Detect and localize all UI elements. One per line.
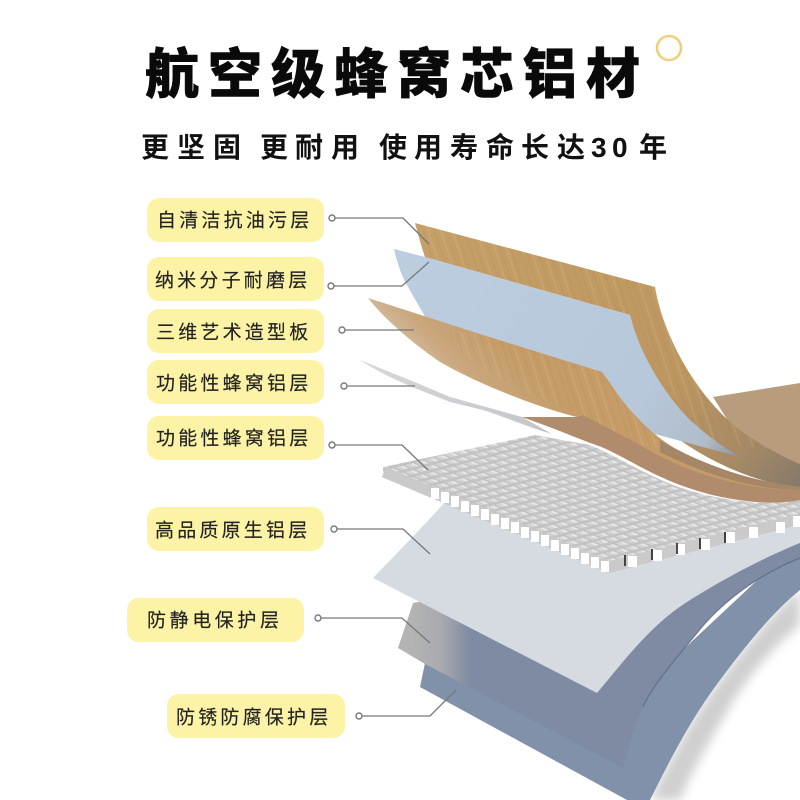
layer: thin grey sheet (360, 360, 552, 434)
callout: 高品质原生铝层: 高品质原生铝层 (155, 520, 310, 542)
layer: aluminium sheet (373, 500, 800, 693)
callout: 功能性蜂窝铝层 upper: 功能性蜂窝铝层 (156, 372, 311, 394)
subtitle: 更坚固更耐用使用寿命长达30年 (141, 131, 667, 163)
callout: 防锈防腐保护层: 防锈防腐保护层 (176, 706, 331, 728)
callout: 纳米分子耐磨层 (147, 257, 429, 301)
shadow under sheets (650, 590, 800, 800)
title: 航空级蜂窝芯铝材 (145, 45, 640, 105)
callout: 三维艺术造型板: 三维艺术造型板 (156, 322, 311, 344)
layer: top wood sheet (415, 223, 800, 488)
callout: 功能性蜂窝铝层 lower: 功能性蜂窝铝层 (156, 428, 311, 450)
callout: 纳米分子耐磨层: 纳米分子耐磨层 (155, 270, 310, 292)
flooring base surface (713, 383, 800, 475)
callout: 功能性蜂窝铝层 lower (147, 416, 428, 470)
callout: 自清洁抗油污层 (147, 198, 429, 244)
layer: rust-proof bottom sheet (420, 540, 800, 800)
callout: 三维艺术造型板 (147, 309, 414, 353)
callout: 功能性蜂窝铝层 upper (147, 360, 415, 404)
layer: honeycomb core (383, 435, 800, 573)
icon: decorative ring (657, 36, 681, 60)
layer: blue wear film (394, 249, 740, 457)
layer: lower brown surface (522, 413, 800, 503)
layer: antistatic sheet (398, 530, 800, 768)
callout: 高品质原生铝层 (147, 507, 430, 554)
layer: third wood panel (368, 298, 800, 490)
callout: 自清洁抗油污层: 自清洁抗油污层 (157, 210, 312, 232)
callout: 防静电保护层: 防静电保护层 (147, 610, 283, 632)
callout: 防静电保护层 (127, 598, 430, 643)
layered material diagram (360, 223, 800, 800)
callout: 防锈防腐保护层 (167, 690, 456, 738)
